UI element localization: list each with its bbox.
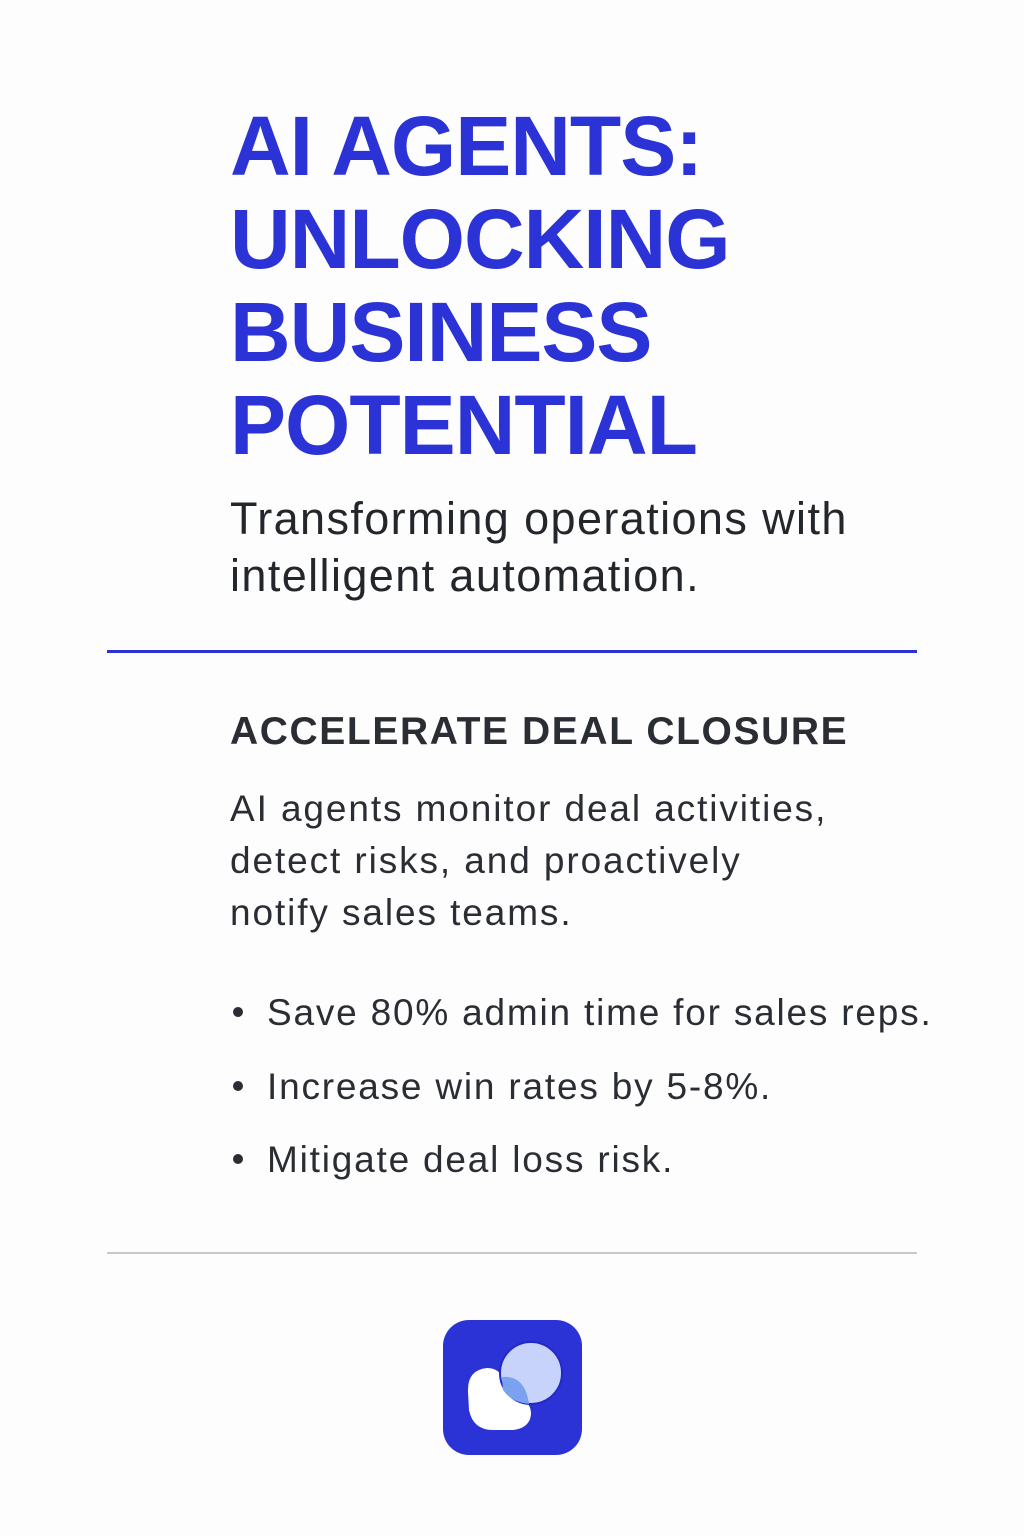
body text <box>230 788 827 933</box>
title: UNLOCKING <box>230 192 730 286</box>
title <box>230 99 730 472</box>
bullet 1: Save 80% admin time for sales reps. <box>267 992 933 1033</box>
title: BUSINESS <box>230 285 651 379</box>
icon: logo <box>443 1320 582 1455</box>
body text: notify sales teams. <box>230 892 573 933</box>
body text: AI agents monitor deal activities, <box>230 788 827 829</box>
title: POTENTIAL <box>230 378 697 472</box>
section heading: ACCELERATE DEAL CLOSURE <box>230 710 848 753</box>
bullet 3: Mitigate deal loss risk. <box>267 1139 674 1180</box>
title: AI AGENTS: <box>230 99 702 193</box>
subtitle <box>230 493 848 601</box>
subtitle: intelligent automation. <box>230 550 700 601</box>
bullet 2: Increase win rates by 5-8%. <box>267 1066 772 1107</box>
bullet list <box>233 992 933 1180</box>
body text: detect risks, and proactively <box>230 840 742 881</box>
subtitle: Transforming operations with <box>230 493 848 544</box>
